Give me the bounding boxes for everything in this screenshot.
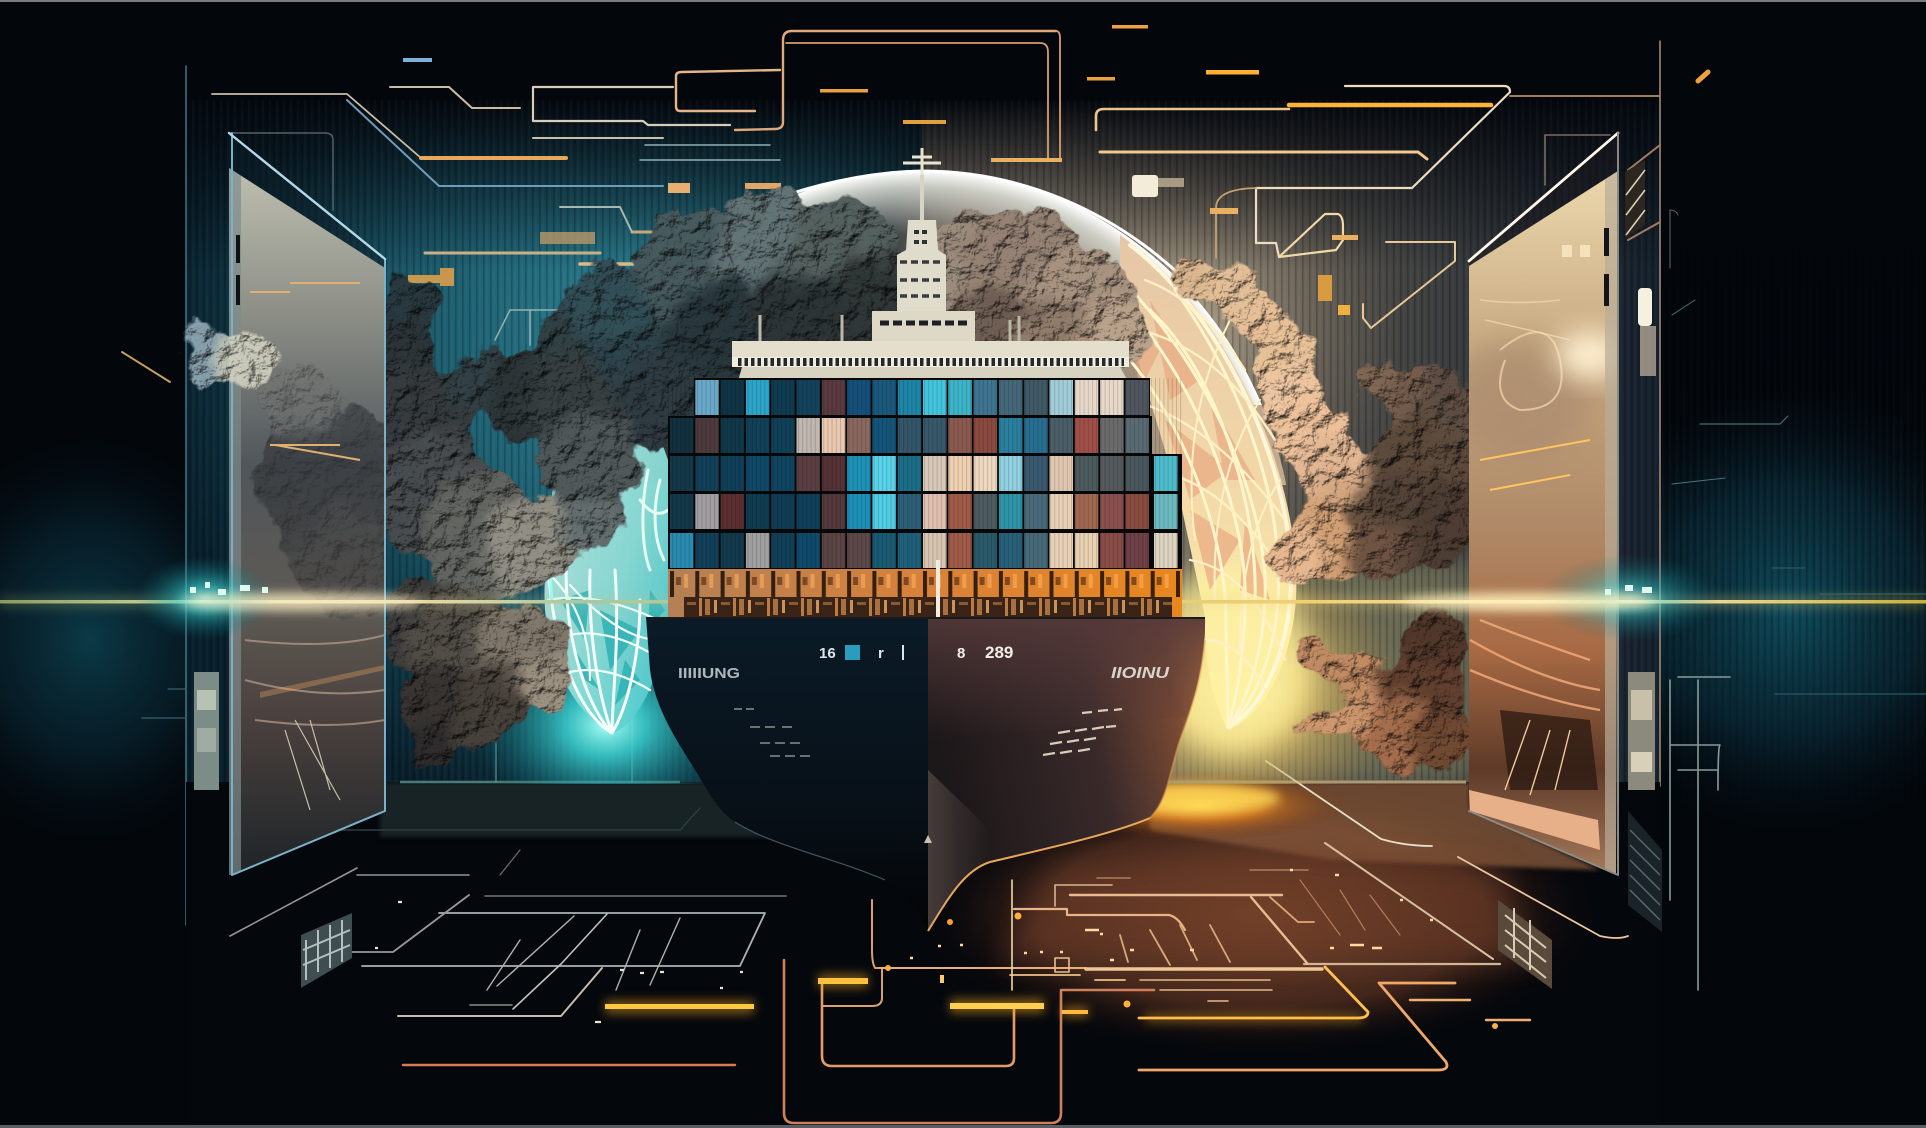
hull markings: 8 xyxy=(957,645,965,662)
right outer frame lines xyxy=(122,41,1926,990)
container stack xyxy=(668,378,1182,569)
ship xyxy=(646,148,1205,931)
floor circuit traces centre and right xyxy=(784,761,1628,1123)
glowing floor bars xyxy=(375,870,1498,1029)
dome rim xyxy=(720,171,1180,275)
top circuit traces xyxy=(212,25,1708,345)
left panel splash xyxy=(182,321,279,389)
left globe wireframe xyxy=(488,444,704,784)
hull markings: 16 xyxy=(819,645,836,662)
ship superstructure xyxy=(732,148,1129,381)
lit cargo band xyxy=(668,560,1182,617)
floor device left xyxy=(301,913,352,988)
floor circuit traces left xyxy=(230,808,786,1065)
hull xyxy=(646,617,1205,931)
floor xyxy=(186,640,1660,1128)
hull markings: IIOINU xyxy=(1111,665,1170,682)
globe xyxy=(471,165,1405,830)
horizon light beam xyxy=(0,554,1926,642)
left clouds xyxy=(359,189,938,765)
hull markings xyxy=(678,643,1170,756)
right globe wireframe xyxy=(1120,235,1388,784)
right clouds tan stream xyxy=(1176,258,1485,775)
panel: right glass screen xyxy=(1450,133,1662,932)
top right clouds xyxy=(915,208,1149,396)
hull markings: r xyxy=(878,645,884,662)
hull markings: IIIIIUNG xyxy=(678,665,740,682)
panel: left glass screen xyxy=(194,133,404,875)
background xyxy=(0,100,1926,796)
clouds around and over the globe xyxy=(359,189,1485,775)
hull markings: 289 xyxy=(985,643,1013,662)
floor device right xyxy=(1498,900,1552,989)
